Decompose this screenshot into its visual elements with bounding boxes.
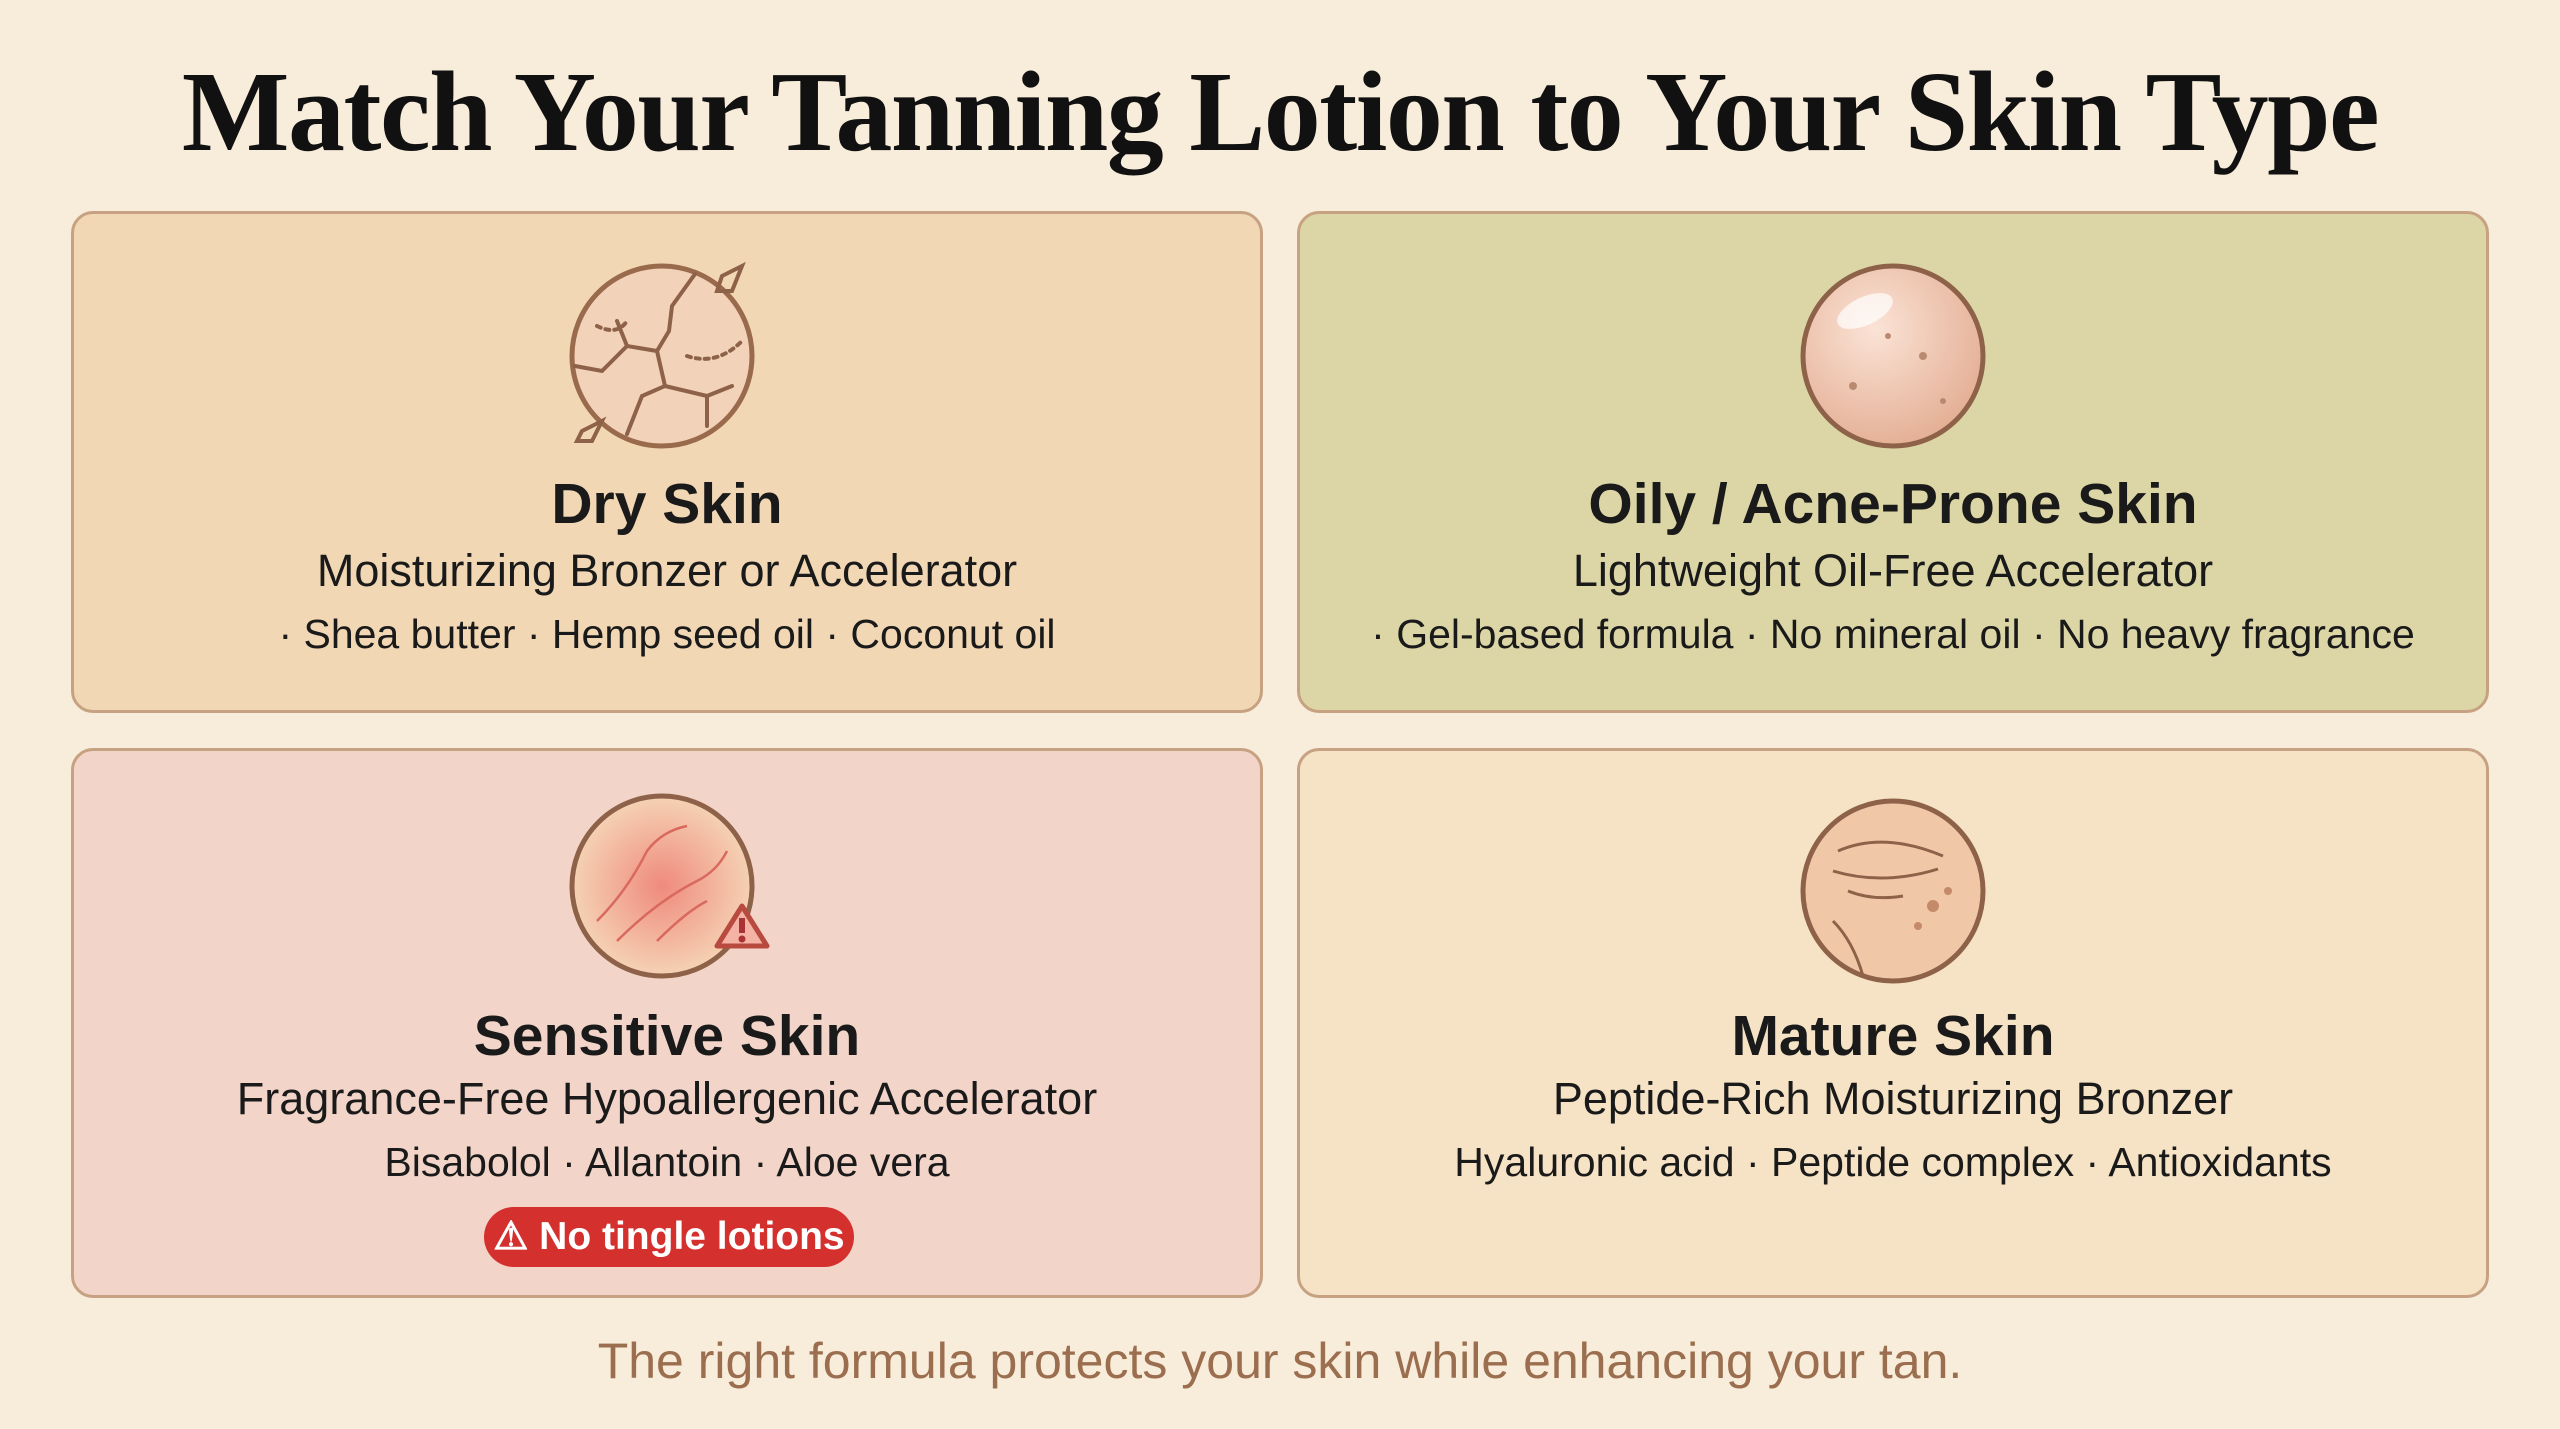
icon: irritated skin with warning bbox=[570, 794, 770, 978]
subtitle: Lightweight Oil-Free Accelerator bbox=[1573, 545, 2213, 596]
subtitle: Peptide-Rich Moisturizing Bronzer bbox=[1553, 1073, 2233, 1124]
ingredients: Bisabolol · Allantoin · Aloe vera bbox=[384, 1139, 950, 1185]
heading: Oily / Acne-Prone Skin bbox=[1588, 472, 2198, 536]
panel: oily skin bbox=[1297, 211, 2489, 713]
heading: Dry Skin bbox=[551, 472, 783, 536]
badge: no tingle: ⚠ No tingle lotions bbox=[493, 1215, 845, 1258]
ingredients: Hyaluronic acid · Peptide complex · Antioxidants bbox=[1454, 1139, 2332, 1185]
icon: mature skin bbox=[1800, 798, 1986, 984]
panel: sensitive skin bbox=[71, 748, 1263, 1298]
heading: Sensitive Skin bbox=[474, 1004, 860, 1068]
ingredients: · Shea butter · Hemp seed oil · Coconut oil bbox=[278, 611, 1056, 657]
panel: mature skin bbox=[1297, 748, 2489, 1298]
subtitle: Moisturizing Bronzer or Accelerator bbox=[317, 545, 1017, 596]
footer: The right formula protects your skin while enhancing your tan. bbox=[598, 1333, 1962, 1389]
icon: cracked skin bbox=[570, 262, 754, 448]
ingredients: · Gel-based formula · No mineral oil · No heavy fragrance bbox=[1371, 611, 2415, 657]
heading: Mature Skin bbox=[1731, 1004, 2055, 1068]
title: Match Your Tanning Lotion to Your Skin Type bbox=[182, 48, 2378, 175]
badge: no tingle bbox=[484, 1207, 854, 1267]
icon: oily sphere bbox=[1800, 264, 1986, 448]
panel: dry skin bbox=[71, 211, 1263, 713]
subtitle: Fragrance-Free Hypoallergenic Accelerator bbox=[237, 1073, 1097, 1124]
